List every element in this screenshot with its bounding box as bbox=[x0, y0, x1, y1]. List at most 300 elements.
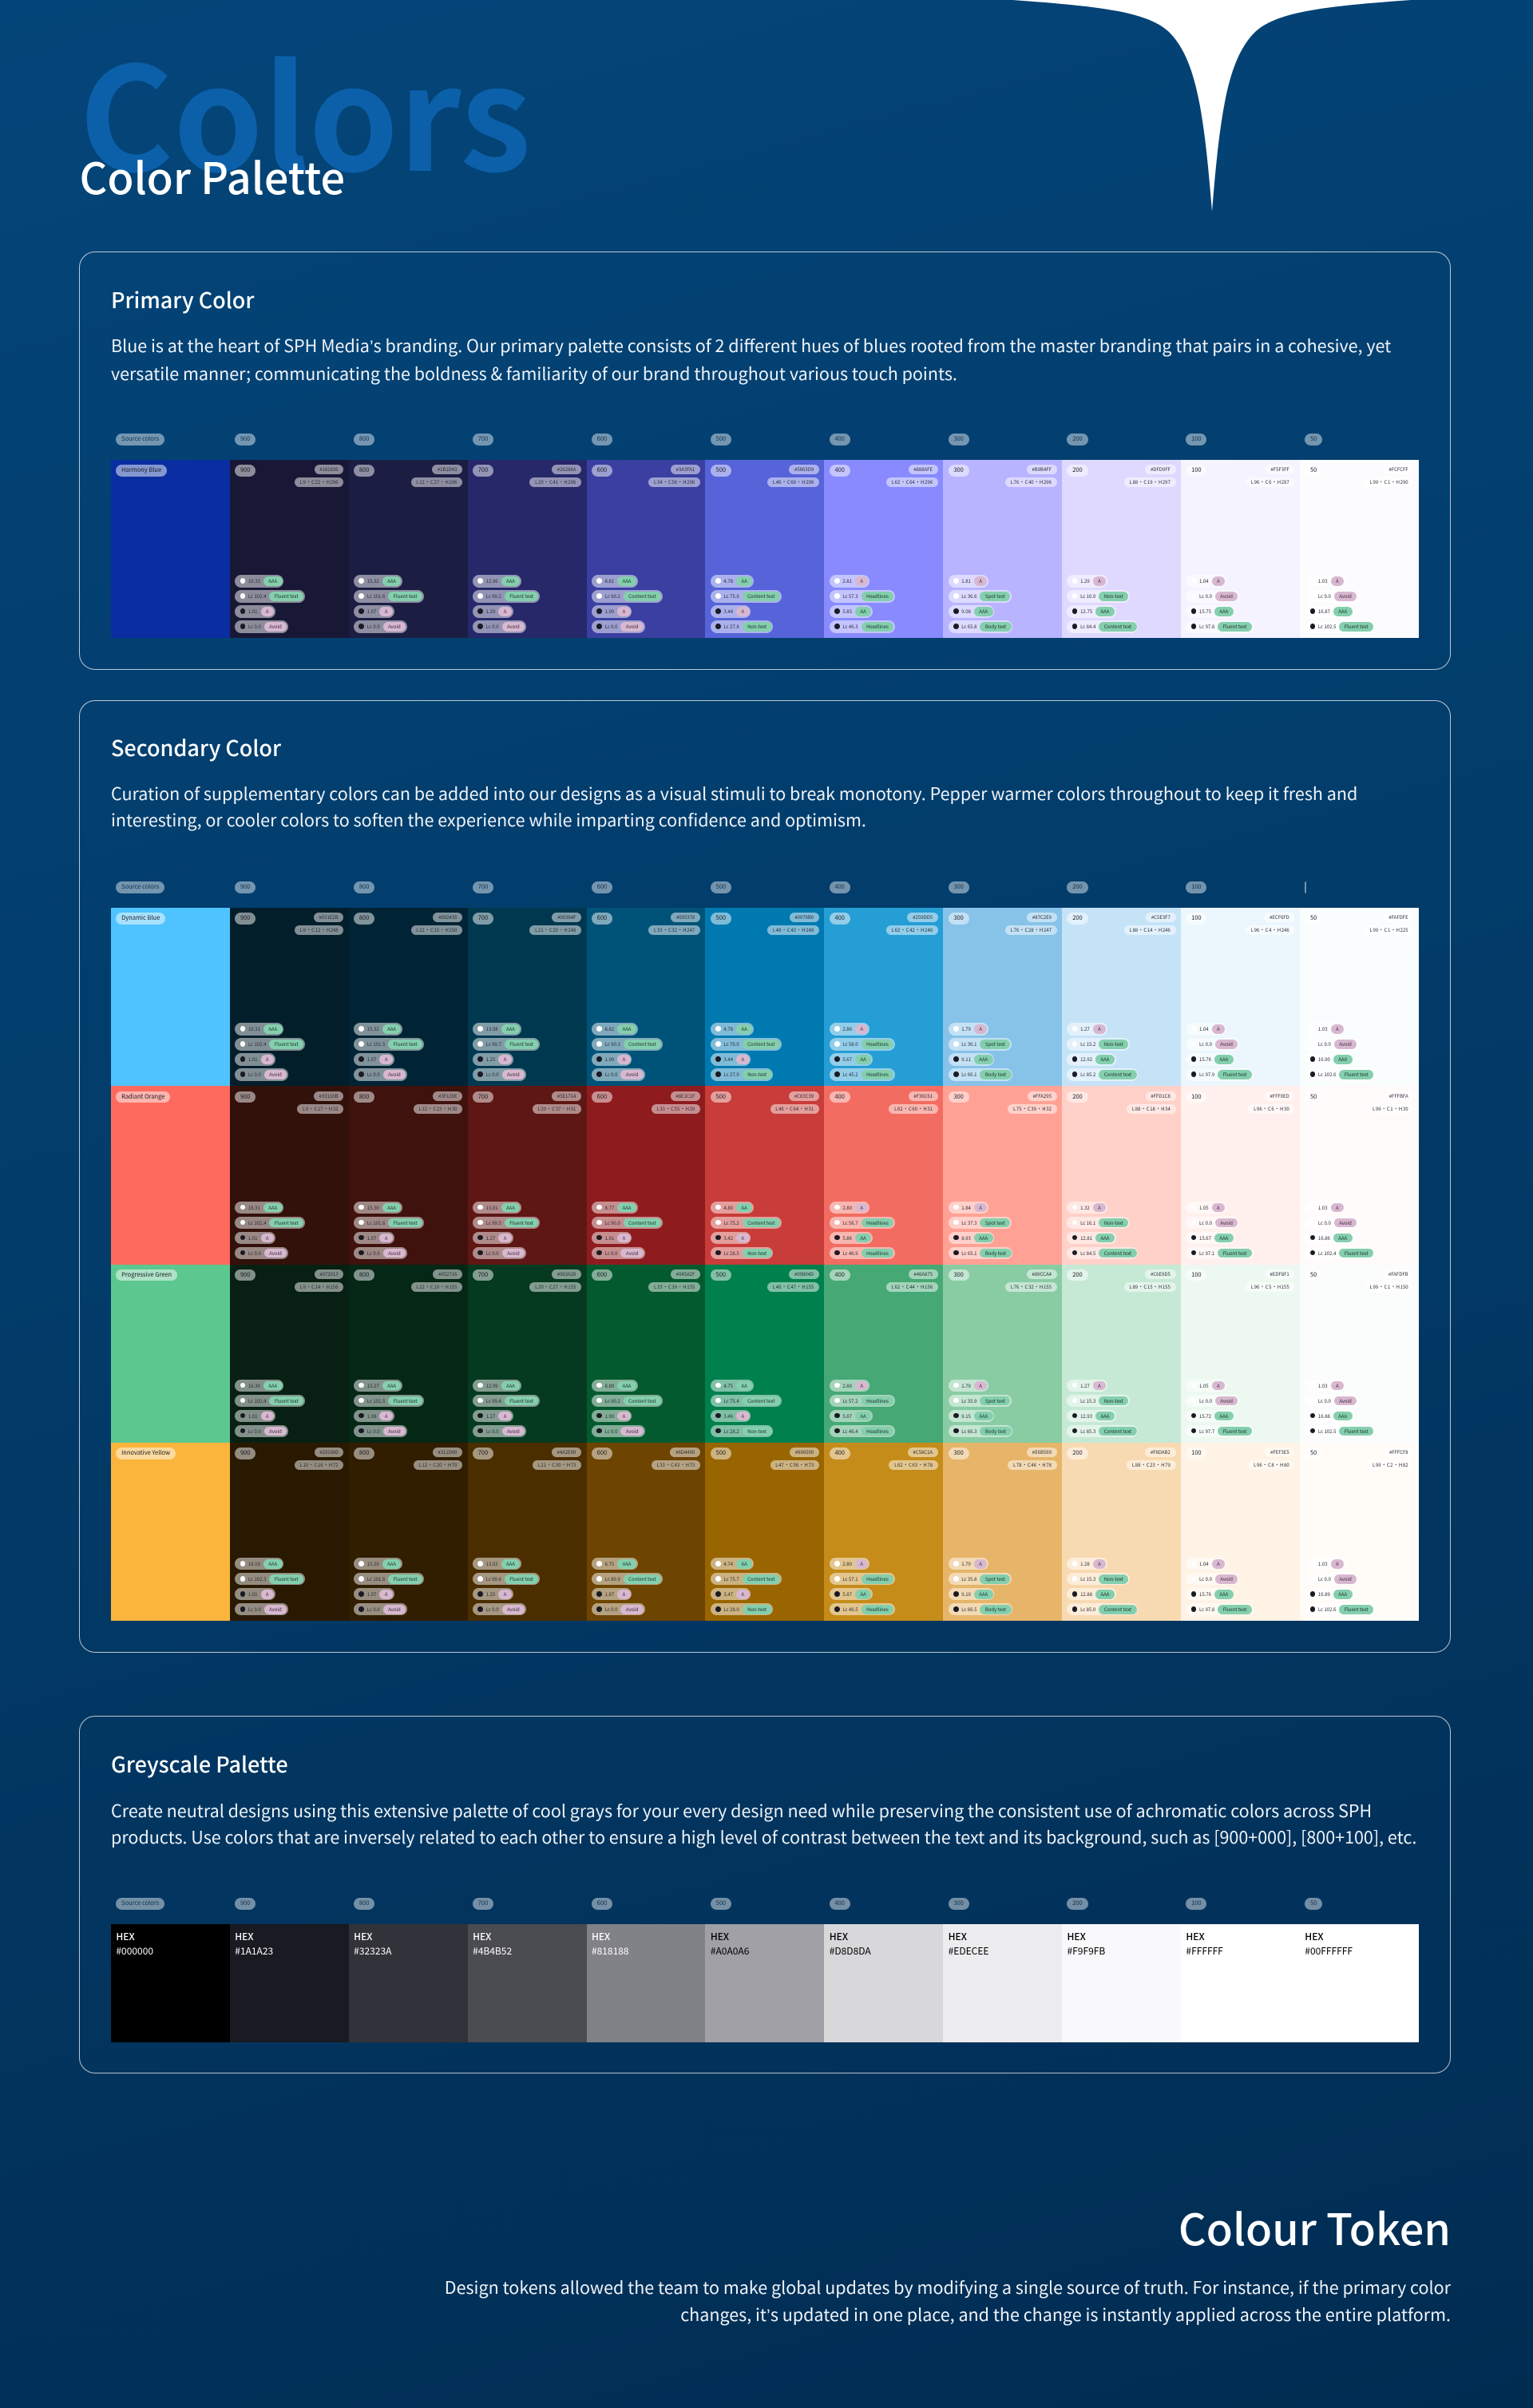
swatch: Harmony Blue 700 bbox=[468, 460, 587, 638]
swatch: Progressive Green 200: 12.93 bbox=[1080, 1412, 1092, 1420]
swatch: Radiant Orange 900: L 9 • C 17 • H 32 bbox=[303, 1105, 339, 1112]
scale labels: primary: 900 bbox=[240, 434, 250, 443]
swatch: Innovative Yellow 600 bbox=[587, 1443, 705, 1621]
swatch: Innovative Yellow 700: 1.25 bbox=[486, 1590, 495, 1598]
swatch: Dynamic Blue 300: L 76 • C 28 • H 247 bbox=[1011, 926, 1052, 933]
swatch: Radiant Orange 100: 1.05 bbox=[1199, 1204, 1209, 1211]
text block: secondary color description: Curation of supplementary colors can be added into our designs as a visual stimuli to break monotony. Pepper warmer colors throughout to keep it fresh and bbox=[111, 781, 1357, 806]
swatch: Progressive Green 800: A bbox=[385, 1412, 387, 1420]
swatch: Dynamic Blue 600: 1.90 bbox=[605, 1055, 614, 1063]
swatch: Innovative Yellow 500: 500 bbox=[716, 1448, 726, 1457]
swatch: Dynamic Blue 900: #031E2B bbox=[319, 913, 339, 921]
swatch: Harmony Blue 300: Lc 36.6 bbox=[961, 592, 976, 600]
swatch: Dynamic Blue 900: Avoid bbox=[269, 1071, 282, 1078]
swatch: Radiant Orange 300 bbox=[943, 1086, 1062, 1265]
swatch: Dynamic Blue 300: A bbox=[979, 1025, 982, 1032]
swatch: Harmony Blue 600: AAA bbox=[623, 577, 631, 584]
swatch: Dynamic Blue 800: #002435 bbox=[438, 913, 457, 921]
swatch: Harmony Blue 700: Avoid bbox=[507, 623, 520, 630]
scale labels: primary bbox=[116, 434, 1322, 446]
swatch: Innovative Yellow 600: Lc 89.9 bbox=[605, 1575, 620, 1582]
scale labels: secondary: 800 bbox=[359, 882, 369, 891]
swatch: Harmony Blue 400: Headlines bbox=[866, 623, 889, 630]
swatch: Progressive Green source bbox=[111, 1265, 230, 1443]
swatch: Progressive Green source: Progressive Green bbox=[121, 1270, 172, 1279]
swatch: Innovative Yellow 700 bbox=[468, 1443, 587, 1621]
swatch: Innovative Yellow 300: Spot text bbox=[985, 1575, 1005, 1582]
swatch: Harmony Blue 700: L 20 • C 41 • H 296 bbox=[535, 478, 576, 485]
swatch: Dynamic Blue 100: L 96 • C 4 • H 246 bbox=[1251, 926, 1289, 933]
scale labels: secondary: 100 bbox=[1191, 882, 1202, 891]
swatch: Dynamic Blue 700: AAA bbox=[506, 1025, 515, 1032]
swatch: Radiant Orange 300: 1.84 bbox=[961, 1204, 971, 1211]
swatch: Dynamic Blue 800: L 12 • C 15 • H 250 bbox=[416, 926, 457, 933]
swatch: Innovative Yellow 200: Non-text bbox=[1104, 1575, 1123, 1582]
swatch: Radiant Orange 50: AAA bbox=[1338, 1234, 1347, 1242]
swatch: Innovative Yellow 600: 600 bbox=[597, 1448, 607, 1457]
swatch: Innovative Yellow 300: Body text bbox=[985, 1606, 1006, 1613]
swatch: Dynamic Blue 500: AA bbox=[741, 1025, 747, 1032]
swatch: Progressive Green 100: #EDF8F1 bbox=[1270, 1270, 1289, 1277]
swatch: Progressive Green 50: Fluent text bbox=[1345, 1428, 1369, 1435]
swatch: Dynamic Blue 200 bbox=[1062, 908, 1181, 1086]
swatch: Progressive Green 800: Lc 101.5 bbox=[367, 1397, 385, 1404]
swatch: Innovative Yellow 500: Lc 28.0 bbox=[723, 1606, 739, 1613]
swatch: Progressive Green 200: Lc 85.3 bbox=[1080, 1428, 1095, 1435]
scale labels: greyscale: 200 bbox=[1072, 1899, 1083, 1907]
swatch: Innovative Yellow 50: L 99 • C 2 • H 82 bbox=[1373, 1461, 1408, 1468]
swatch: Harmony Blue 700: Fluent text bbox=[509, 592, 533, 600]
swatch: Radiant Orange 300: 8.93 bbox=[961, 1234, 971, 1242]
swatch: Innovative Yellow 300 bbox=[943, 1443, 1062, 1621]
heading: Secondary Color: Secondary Color bbox=[111, 731, 281, 762]
swatch: Innovative Yellow 200: A bbox=[1098, 1560, 1101, 1567]
swatch: Harmony Blue 800: A bbox=[385, 608, 387, 615]
swatch: Harmony Blue 100: AAA bbox=[1219, 608, 1228, 615]
swatch: grey 818188: HEX bbox=[592, 1930, 610, 1943]
swatch: grey 4B4B52: HEX bbox=[473, 1930, 491, 1943]
swatch: Progressive Green 100: 100 bbox=[1191, 1270, 1202, 1279]
swatch: Radiant Orange 200: 200 bbox=[1072, 1092, 1083, 1101]
swatch: Radiant Orange 700: AAA bbox=[506, 1204, 515, 1211]
swatch: Dynamic Blue 200: AAA bbox=[1100, 1055, 1109, 1063]
heading: Greyscale Palette: Greyscale Palette bbox=[111, 1748, 288, 1779]
swatch: Radiant Orange 800: AAA bbox=[387, 1204, 396, 1211]
swatch: Radiant Orange 100: 15.67 bbox=[1199, 1234, 1211, 1242]
swatch: Innovative Yellow 800: AAA bbox=[387, 1560, 396, 1567]
swatch: Radiant Orange 400: 400 bbox=[834, 1092, 845, 1101]
swatch: Progressive Green 400: Headlines bbox=[866, 1428, 889, 1435]
swatch: grey 32323A: HEX bbox=[354, 1930, 372, 1943]
swatch: Dynamic Blue 700: Fluent text bbox=[509, 1040, 533, 1048]
swatch: Harmony Blue 400: A bbox=[860, 577, 863, 584]
swatch: Radiant Orange 200: Non-text bbox=[1104, 1219, 1123, 1226]
swatch: Dynamic Blue 50: 1.03 bbox=[1318, 1025, 1328, 1032]
swatch: Harmony Blue 50: 16.87 bbox=[1318, 608, 1330, 615]
swatch: Innovative Yellow 50: Fluent text bbox=[1345, 1606, 1369, 1613]
swatch: Progressive Green 900: Fluent text bbox=[275, 1397, 299, 1404]
swatch: Progressive Green 600: 600 bbox=[597, 1270, 607, 1279]
swatch: Innovative Yellow 800: Lc 101.6 bbox=[367, 1575, 385, 1582]
swatch: Harmony Blue 500: 3.44 bbox=[723, 608, 733, 615]
swatch: Innovative Yellow 100: Lc 97.8 bbox=[1199, 1606, 1214, 1613]
swatch: Progressive Green 50: Lc 102.5 bbox=[1318, 1428, 1336, 1435]
text block: greyscale description: Create neutral designs using this extensive palette of cool grays for your every design need while preserving the consistent use of achromatic colors across SPH bbox=[111, 1798, 1372, 1823]
swatch: Progressive Green 200: Lc 15.3 bbox=[1080, 1397, 1095, 1404]
swatch: Radiant Orange source: Radiant Orange bbox=[121, 1092, 164, 1101]
swatch: Innovative Yellow 300: 9.19 bbox=[961, 1590, 971, 1598]
swatch: Dynamic Blue 500: L 48 • C 43 • H 248 bbox=[773, 926, 814, 933]
swatch: Harmony Blue 700: #26286A bbox=[557, 465, 576, 473]
swatch: Radiant Orange 900: AAA bbox=[268, 1204, 277, 1211]
swatch: Progressive Green 300: 300 bbox=[953, 1270, 964, 1279]
swatch: Innovative Yellow 50: #FFFCF8 bbox=[1389, 1448, 1408, 1455]
swatch: Progressive Green 700 bbox=[468, 1265, 587, 1443]
swatch: Dynamic Blue 800: Lc 101.5 bbox=[367, 1040, 385, 1048]
swatch: Dynamic Blue 700: Avoid bbox=[507, 1071, 520, 1078]
swatch: Progressive Green 900: AAA bbox=[268, 1382, 277, 1389]
swatch: Radiant Orange 800: Lc 0.0 bbox=[367, 1250, 380, 1257]
scale labels: greyscale: 300 bbox=[953, 1899, 964, 1907]
swatch: Radiant Orange 500: AA bbox=[741, 1204, 747, 1211]
swatch: Radiant Orange 800: Avoid bbox=[388, 1250, 401, 1257]
swatch: Innovative Yellow source: Innovative Yellow bbox=[121, 1448, 170, 1457]
swatch: Dynamic Blue 400: 2.86 bbox=[842, 1025, 852, 1032]
swatch: Radiant Orange 100: #FFF0ED bbox=[1270, 1092, 1289, 1099]
swatch: Innovative Yellow 900: L 10 • C 16 • H 72 bbox=[300, 1461, 339, 1468]
swatch: Innovative Yellow 800: 15.29 bbox=[367, 1560, 379, 1567]
swatch: Innovative Yellow 500: AA bbox=[741, 1560, 747, 1567]
swatch: Innovative Yellow 600: A bbox=[623, 1590, 625, 1598]
swatch: Progressive Green 400: A bbox=[860, 1382, 863, 1389]
swatch: Harmony Blue 800: Fluent text bbox=[394, 592, 418, 600]
swatch: Harmony Blue 50: Lc 102.5 bbox=[1318, 623, 1336, 630]
swatch: Harmony Blue 500: AA bbox=[741, 577, 747, 584]
swatch: Radiant Orange 800: 1.07 bbox=[367, 1234, 376, 1242]
swatch: Dynamic Blue 300: 300 bbox=[953, 913, 964, 922]
swatch: Harmony Blue 200: Lc 16.0 bbox=[1080, 592, 1095, 600]
swatch: Harmony Blue 900: Avoid bbox=[269, 623, 282, 630]
swatch: grey 00FFFFFF: HEX bbox=[1305, 1930, 1324, 1943]
swatch: Dynamic Blue 200: Content text bbox=[1104, 1071, 1131, 1078]
swatch: Harmony Blue 600: Lc 0.0 bbox=[605, 623, 617, 630]
swatch: Progressive Green 400: Lc 57.2 bbox=[842, 1397, 858, 1404]
text block: colour token description: changes, it’s updated in one place, and the change is instantly applied across the entire platform. bbox=[680, 2302, 1451, 2327]
swatch: Progressive Green 300: Lc 35.9 bbox=[961, 1397, 976, 1404]
swatch: Innovative Yellow 300: 300 bbox=[953, 1448, 964, 1457]
swatch: Innovative Yellow 800 bbox=[349, 1443, 468, 1621]
swatch: Dynamic Blue 300 bbox=[943, 908, 1062, 1086]
swatch: Dynamic Blue 500: Non-text bbox=[747, 1071, 766, 1078]
swatch: grey F9F9FB bbox=[1062, 1924, 1181, 2042]
swatch: Harmony Blue 600: A bbox=[623, 608, 625, 615]
swatch: Progressive Green 100: Lc 97.7 bbox=[1199, 1428, 1214, 1435]
swatch: Harmony Blue 900: Lc 102.4 bbox=[248, 592, 266, 600]
swatch: Progressive Green 200: Non-text bbox=[1104, 1397, 1123, 1404]
panel: secondary color bbox=[79, 700, 1451, 1653]
swatch: Radiant Orange 600: 600 bbox=[597, 1092, 607, 1101]
swatch: Harmony Blue 50: 50 bbox=[1310, 465, 1317, 474]
swatch: Progressive Green 300: #89CCA4 bbox=[1032, 1270, 1052, 1277]
swatch: Innovative Yellow 500: 3.47 bbox=[723, 1590, 733, 1598]
swatch: Dynamic Blue 50: L 99 • C 1 • H 225 bbox=[1370, 926, 1408, 933]
swatch: grey D8D8DA bbox=[824, 1924, 943, 2042]
swatch: Innovative Yellow 100: Fluent text bbox=[1223, 1606, 1246, 1613]
swatch: Harmony Blue 800: L 12 • C 27 • H 296 bbox=[416, 478, 457, 485]
swatch: Dynamic Blue 800: 800 bbox=[359, 913, 369, 922]
swatch: Dynamic Blue 300: 9.11 bbox=[961, 1055, 971, 1063]
swatch: Dynamic Blue 400: L 62 • C 42 • H 248 bbox=[892, 926, 933, 933]
swatch: Innovative Yellow 50: Lc 0.0 bbox=[1318, 1575, 1331, 1582]
swatch: Innovative Yellow 50 bbox=[1300, 1443, 1419, 1621]
swatch: Dynamic Blue 100: Avoid bbox=[1220, 1040, 1233, 1048]
swatch: Harmony Blue 100: Lc 0.0 bbox=[1199, 592, 1212, 600]
swatch: Harmony Blue 900: 16.33 bbox=[248, 577, 260, 584]
text block: greyscale description: products. Use colors that are inversely related to each other to ensure a high level of contrast between the text and its background, such as [900+000], [800+100], etc. bbox=[111, 1824, 1416, 1849]
swatch: Harmony Blue 100: L 96 • C 6 • H 297 bbox=[1251, 478, 1289, 485]
swatch: grey EDECEE: #EDECEE bbox=[949, 1944, 988, 1958]
swatch: Harmony Blue 800: 800 bbox=[359, 465, 369, 474]
swatch: Harmony Blue 500: Lc 75.9 bbox=[723, 592, 739, 600]
swatch: Dynamic Blue 500: A bbox=[741, 1055, 744, 1063]
swatch: Dynamic Blue 200: Non-text bbox=[1104, 1040, 1123, 1048]
swatch: Dynamic Blue 600: Lc 90.3 bbox=[605, 1040, 620, 1048]
swatch: Dynamic Blue 500: 500 bbox=[716, 913, 726, 922]
swatch: Dynamic Blue 900: A bbox=[266, 1055, 269, 1063]
swatch: Dynamic Blue 50: Lc 0.0 bbox=[1318, 1040, 1331, 1048]
swatch: Harmony Blue 600: 1.90 bbox=[605, 608, 614, 615]
swatch: Innovative Yellow 50: Avoid bbox=[1339, 1575, 1352, 1582]
swatch: Harmony Blue 600: 8.81 bbox=[605, 577, 614, 584]
scale labels: primary: 500 bbox=[716, 434, 726, 443]
swatch: Innovative Yellow 400: L 62 • C 63 • H 78 bbox=[894, 1461, 933, 1468]
swatch: Harmony Blue 100: 1.04 bbox=[1199, 577, 1209, 584]
scale labels: secondary: Source colors bbox=[121, 882, 159, 891]
swatch: Innovative Yellow 900: Fluent text bbox=[275, 1575, 299, 1582]
swatch: Progressive Green 900 bbox=[230, 1265, 349, 1443]
swatch: Dynamic Blue 500: Lc 76.0 bbox=[723, 1040, 739, 1048]
swatch: Radiant Orange 400 bbox=[824, 1086, 943, 1265]
swatch: Harmony Blue 900: #181836 bbox=[319, 465, 339, 473]
swatch: Dynamic Blue 300: AAA bbox=[979, 1055, 988, 1063]
swatch: Dynamic Blue 300: Lc 36.1 bbox=[961, 1040, 976, 1048]
swatch: Radiant Orange 100: Fluent text bbox=[1223, 1250, 1246, 1257]
swatch: Dynamic Blue 400 bbox=[824, 908, 943, 1086]
swatch: Progressive Green 900: Lc 102.4 bbox=[248, 1397, 266, 1404]
swatch: Progressive Green 100: Fluent text bbox=[1223, 1428, 1246, 1435]
swatch: Harmony Blue 500: Lc 27.8 bbox=[723, 623, 739, 630]
swatch: Progressive Green 500: Non-text bbox=[747, 1428, 766, 1435]
swatch: Radiant Orange 500: A bbox=[741, 1234, 744, 1242]
swatch: Progressive Green 50: #FAFDFB bbox=[1388, 1270, 1408, 1277]
swatch: Radiant Orange 700: Lc 0.0 bbox=[486, 1250, 499, 1257]
swatch: Radiant Orange 200 bbox=[1062, 1086, 1181, 1265]
swatch: Innovative Yellow 900: Lc 102.3 bbox=[248, 1575, 266, 1582]
swatch: Innovative Yellow 400: AA bbox=[860, 1590, 866, 1598]
swatch: Radiant Orange 50: #FFFBFA bbox=[1389, 1092, 1408, 1099]
swatch: Dynamic Blue 300: Lc 66.1 bbox=[961, 1071, 976, 1078]
swatch: Harmony Blue 100: Avoid bbox=[1220, 592, 1233, 600]
swatch: Dynamic Blue 50: #FAFDFE bbox=[1388, 913, 1408, 921]
swatch: Dynamic Blue 800: AAA bbox=[387, 1025, 396, 1032]
swatch: Radiant Orange 400: #F36C61 bbox=[913, 1092, 933, 1099]
swatch: Harmony Blue 400: AA bbox=[860, 608, 866, 615]
swatch: Dynamic Blue 700 bbox=[468, 908, 587, 1086]
swatch: Dynamic Blue 400: AA bbox=[860, 1055, 866, 1063]
swatch: Harmony Blue 900: Fluent text bbox=[275, 592, 299, 600]
swatch: Progressive Green 400: 2.80 bbox=[842, 1382, 852, 1389]
swatch: Radiant Orange 800: A bbox=[385, 1234, 387, 1242]
swatch: Innovative Yellow 200 bbox=[1062, 1443, 1181, 1621]
swatch: Progressive Green 800: 15.27 bbox=[367, 1382, 379, 1389]
swatch: Dynamic Blue 600: L 33 • C 32 • H 247 bbox=[654, 926, 695, 933]
swatch: Radiant Orange 600: 8.77 bbox=[605, 1204, 614, 1211]
swatch: Dynamic Blue 50 bbox=[1300, 908, 1419, 1086]
swatch: Progressive Green 200: L 89 • C 15 • H 155 bbox=[1130, 1283, 1171, 1290]
swatch: Progressive Green 800: L 12 • C 19 • H 155 bbox=[416, 1283, 457, 1290]
swatch: Radiant Orange 600 bbox=[587, 1086, 705, 1265]
swatch: Radiant Orange 600: Content text bbox=[628, 1219, 656, 1226]
scale labels: primary: 200 bbox=[1072, 434, 1083, 443]
swatch: Progressive Green 500: #00804D bbox=[794, 1270, 814, 1277]
swatch: Progressive Green 500: 3.46 bbox=[723, 1412, 733, 1420]
swatch: Harmony Blue 800 bbox=[349, 460, 468, 638]
swatch: Dynamic Blue 900: 16.31 bbox=[248, 1025, 260, 1032]
swatch: Harmony Blue 100: Fluent text bbox=[1223, 623, 1246, 630]
swatch: Radiant Orange 300: 300 bbox=[953, 1092, 964, 1101]
swatch: Harmony Blue 400: Lc 46.3 bbox=[842, 623, 858, 630]
swatch: Radiant Orange 50: 1.03 bbox=[1318, 1204, 1328, 1211]
swatch: Dynamic Blue 300: #87C2E9 bbox=[1032, 913, 1052, 921]
swatch: Radiant Orange 100: A bbox=[1217, 1204, 1220, 1211]
swatch: Dynamic Blue 400: Headlines bbox=[866, 1071, 889, 1078]
swatch: Harmony Blue source bbox=[111, 460, 230, 638]
swatch: Harmony Blue 900: Lc 0.0 bbox=[248, 623, 261, 630]
swatch: Progressive Green 600: Lc 90.2 bbox=[605, 1397, 620, 1404]
swatch: Progressive Green 200: #C6E9D5 bbox=[1151, 1270, 1171, 1277]
swatch: Radiant Orange 700: 13.01 bbox=[486, 1204, 498, 1211]
swatch: Dynamic Blue 50: A bbox=[1336, 1025, 1339, 1032]
swatch: grey 1A1A23: #1A1A23 bbox=[235, 1944, 273, 1958]
swatch: Innovative Yellow 500 bbox=[705, 1443, 824, 1621]
swatch: Innovative Yellow 500: Non-text bbox=[747, 1606, 766, 1613]
swatch: Radiant Orange 100: L 96 • C 6 • H 30 bbox=[1254, 1105, 1289, 1112]
swatch: Harmony Blue 100: #F5F3FF bbox=[1270, 465, 1289, 473]
swatch: Dynamic Blue 700: Lc 99.7 bbox=[486, 1040, 501, 1048]
swatch: Harmony Blue 50: Lc 0.0 bbox=[1318, 592, 1331, 600]
swatch: Progressive Green 200: A bbox=[1098, 1382, 1101, 1389]
swatch: Harmony Blue 200: A bbox=[1098, 577, 1101, 584]
swatch: Progressive Green 800: 800 bbox=[359, 1270, 369, 1279]
swatch: Harmony Blue 700: AAA bbox=[506, 577, 515, 584]
swatch: Progressive Green 300: 1.79 bbox=[961, 1382, 971, 1389]
swatch: grey FFFFFF: #FFFFFF bbox=[1186, 1944, 1223, 1958]
swatch: grey 32323A bbox=[349, 1924, 468, 2042]
swatch: Progressive Green 400: 5.87 bbox=[842, 1412, 852, 1420]
swatch: Radiant Orange 800: 15.30 bbox=[367, 1204, 379, 1211]
swatch: Progressive Green 800: #052716 bbox=[438, 1270, 457, 1277]
swatch: Progressive Green 100: AAA bbox=[1219, 1412, 1228, 1420]
swatch: Radiant Orange 200: Content text bbox=[1104, 1250, 1131, 1257]
swatch: grey 4B4B52: #4B4B52 bbox=[473, 1944, 512, 1958]
swatch: Radiant Orange 50: Avoid bbox=[1339, 1219, 1352, 1226]
scale labels: secondary: 900 bbox=[240, 882, 250, 891]
swatch: Innovative Yellow 900: 900 bbox=[240, 1448, 250, 1457]
swatch: Radiant Orange 200: AAA bbox=[1100, 1234, 1109, 1242]
swatch: Radiant Orange 300: A bbox=[979, 1204, 982, 1211]
swatch: grey EDECEE: HEX bbox=[949, 1930, 967, 1943]
swatch: Harmony Blue 200: #DFD9FF bbox=[1151, 465, 1171, 473]
swatch: Progressive Green 400: #46A875 bbox=[913, 1270, 933, 1277]
swatch: Progressive Green 50 bbox=[1300, 1265, 1419, 1443]
swatch: Dynamic Blue 400: 400 bbox=[834, 913, 845, 922]
swatch: Radiant Orange 400: AA bbox=[860, 1234, 866, 1242]
swatch: Progressive Green 300: AAA bbox=[979, 1412, 988, 1420]
swatch: Progressive Green 800: AAA bbox=[387, 1382, 396, 1389]
scale labels: secondary: 500 bbox=[716, 882, 726, 891]
swatch: Innovative Yellow source bbox=[111, 1443, 230, 1621]
swatch: Dynamic Blue 500: 4.78 bbox=[723, 1025, 733, 1032]
scale labels: primary: 400 bbox=[834, 434, 845, 443]
swatch: Radiant Orange 200: L 88 • C 18 • H 34 bbox=[1132, 1105, 1171, 1112]
swatch: grey 00FFFFFF: #00FFFFFF bbox=[1305, 1944, 1353, 1958]
swatch: Harmony Blue 100 bbox=[1181, 460, 1300, 638]
swatch: Innovative Yellow 300: 1.79 bbox=[961, 1560, 971, 1567]
swatch: Harmony Blue 100: 15.75 bbox=[1199, 608, 1211, 615]
swatch: Harmony Blue 600: #3A3FA1 bbox=[676, 465, 695, 473]
swatch: Harmony Blue 50: L 99 • C 1 • H 290 bbox=[1370, 478, 1408, 485]
swatch: Radiant Orange 600: A bbox=[623, 1234, 625, 1242]
swatch: Radiant Orange 800: Fluent text bbox=[394, 1219, 418, 1226]
swatch: Progressive Green 100: Lc 0.0 bbox=[1199, 1397, 1212, 1404]
text block: primary color description: Blue is at the heart of SPH Media’s branding. Our primary palette consists of 2 different hues of blues rooted from the master branding that pairs in a cohesive, yet bbox=[111, 333, 1391, 358]
swatch: Harmony Blue 800: Avoid bbox=[388, 623, 401, 630]
swatch: Radiant Orange 700: Avoid bbox=[507, 1250, 520, 1257]
scale labels: primary: 700 bbox=[478, 434, 488, 443]
swatch: Progressive Green 300: A bbox=[979, 1382, 982, 1389]
swatch: Dynamic Blue 700: A bbox=[504, 1055, 506, 1063]
swatch: Dynamic Blue 600: A bbox=[623, 1055, 625, 1063]
swatch: Innovative Yellow 500: L 47 • C 56 • H 73 bbox=[775, 1461, 814, 1468]
swatch: Dynamic Blue 300: Spot text bbox=[985, 1040, 1005, 1048]
swatch: grey A0A0A6: #A0A0A6 bbox=[711, 1944, 749, 1958]
swatch: Harmony Blue 500: L 46 • C 69 • H 296 bbox=[773, 478, 814, 485]
swatch: Progressive Green 500: Content text bbox=[747, 1397, 774, 1404]
swatch: Dynamic Blue 50: 50 bbox=[1310, 913, 1317, 922]
swatch: Harmony Blue 900 bbox=[230, 460, 349, 638]
swatch: Innovative Yellow 50: 16.89 bbox=[1318, 1590, 1330, 1598]
swatch: Dynamic Blue 400: Headlines bbox=[866, 1040, 889, 1048]
swatch: Harmony Blue 300: Spot text bbox=[985, 592, 1005, 600]
swatch: Dynamic Blue 100: Lc 97.9 bbox=[1199, 1071, 1214, 1078]
swatch: Harmony Blue 200: AAA bbox=[1100, 608, 1109, 615]
swatch: Harmony Blue 500 bbox=[705, 460, 824, 638]
swatch: Innovative Yellow 400: 5.87 bbox=[842, 1590, 852, 1598]
swatch: Progressive Green 700: 700 bbox=[478, 1270, 488, 1279]
scale labels: greyscale: Source colors bbox=[121, 1899, 159, 1907]
swatch: Dynamic Blue 600: 8.82 bbox=[605, 1025, 614, 1032]
swatch: Innovative Yellow 900: AAA bbox=[268, 1560, 277, 1567]
swatch: Progressive Green 400 bbox=[824, 1265, 943, 1443]
swatch: Progressive Green 500: AA bbox=[741, 1382, 747, 1389]
palette row: Harmony Blue bbox=[111, 460, 1419, 638]
swatch: Radiant Orange 200: A bbox=[1098, 1204, 1101, 1211]
swatch: Radiant Orange 200: Lc 16.1 bbox=[1080, 1219, 1095, 1226]
swatch: Harmony Blue 600: Avoid bbox=[626, 623, 639, 630]
swatch: Radiant Orange 400: Headlines bbox=[866, 1219, 889, 1226]
swatch: Radiant Orange 400: Lc 56.7 bbox=[842, 1219, 858, 1226]
swatch: Radiant Orange 600: AAA bbox=[623, 1204, 631, 1211]
